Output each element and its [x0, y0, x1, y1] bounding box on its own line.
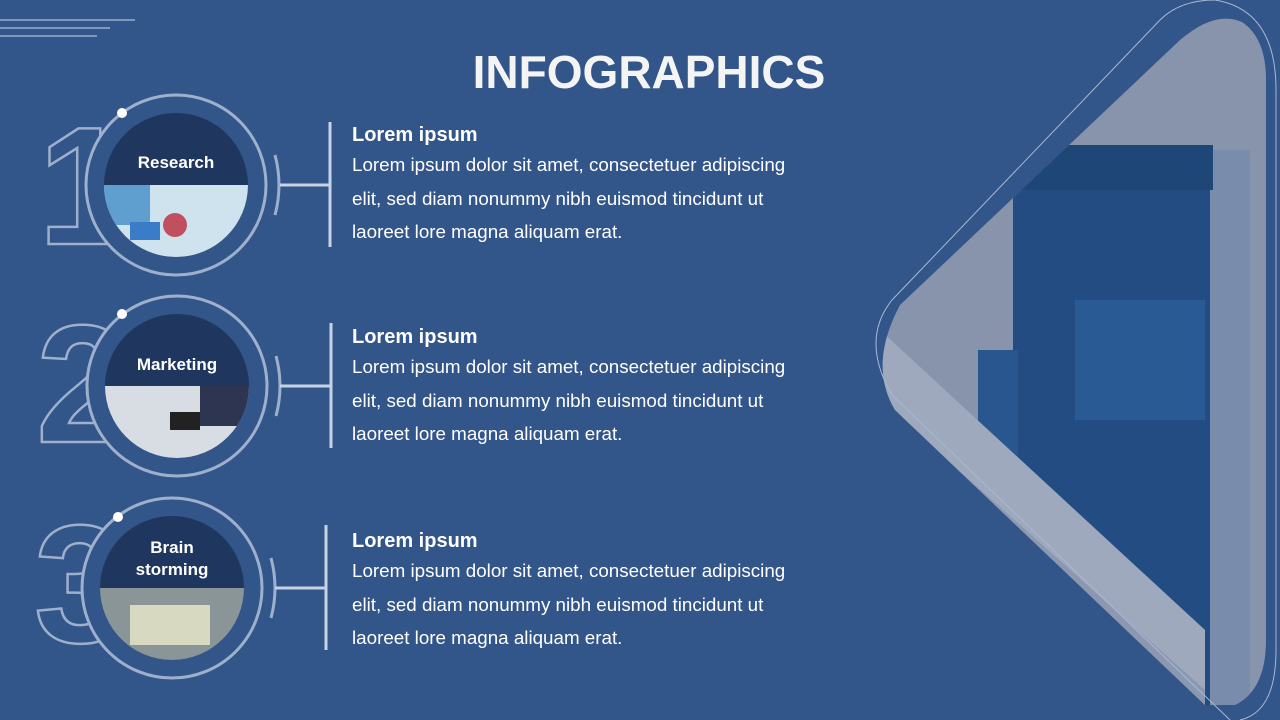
item 3 graphic — [34, 490, 326, 678]
text block 1: Lorem ipsum — [352, 124, 478, 146]
item 3 graphic: storming — [136, 560, 208, 579]
item 2 graphic: Marketing — [137, 355, 217, 374]
title: INFOGRAPHICS — [473, 46, 825, 98]
outline of image shape — [876, 0, 1230, 720]
item 1 graphic: 1 — [38, 92, 131, 280]
text block 2: Lorem ipsum dolor sit amet, consectetuer adipiscing elit, sed diam nonummy nibh euismod tincidunt ut laoreet lore magna aliquam erat. — [352, 356, 785, 444]
item 1 graphic — [38, 92, 330, 280]
photo: building — [882, 18, 1266, 705]
text block 1: Lorem ipsum dolor sit amet, consectetuer adipiscing elit, sed diam nonummy nibh euismod tincidunt ut laoreet lore magna aliquam erat. — [352, 154, 785, 242]
text block 3: Lorem ipsum — [352, 530, 478, 552]
item 2 graphic: 2 — [36, 290, 129, 478]
item 3 graphic: Brain — [150, 538, 194, 557]
item 1 graphic: Research — [138, 153, 214, 172]
item 2 graphic — [36, 290, 331, 478]
text block 2: Lorem ipsum — [352, 326, 478, 348]
text block 3: Lorem ipsum dolor sit amet, consectetuer adipiscing elit, sed diam nonummy nibh euismod tincidunt ut laoreet lore magna aliquam erat. — [352, 560, 785, 648]
item 3 graphic: 3 — [34, 490, 127, 678]
